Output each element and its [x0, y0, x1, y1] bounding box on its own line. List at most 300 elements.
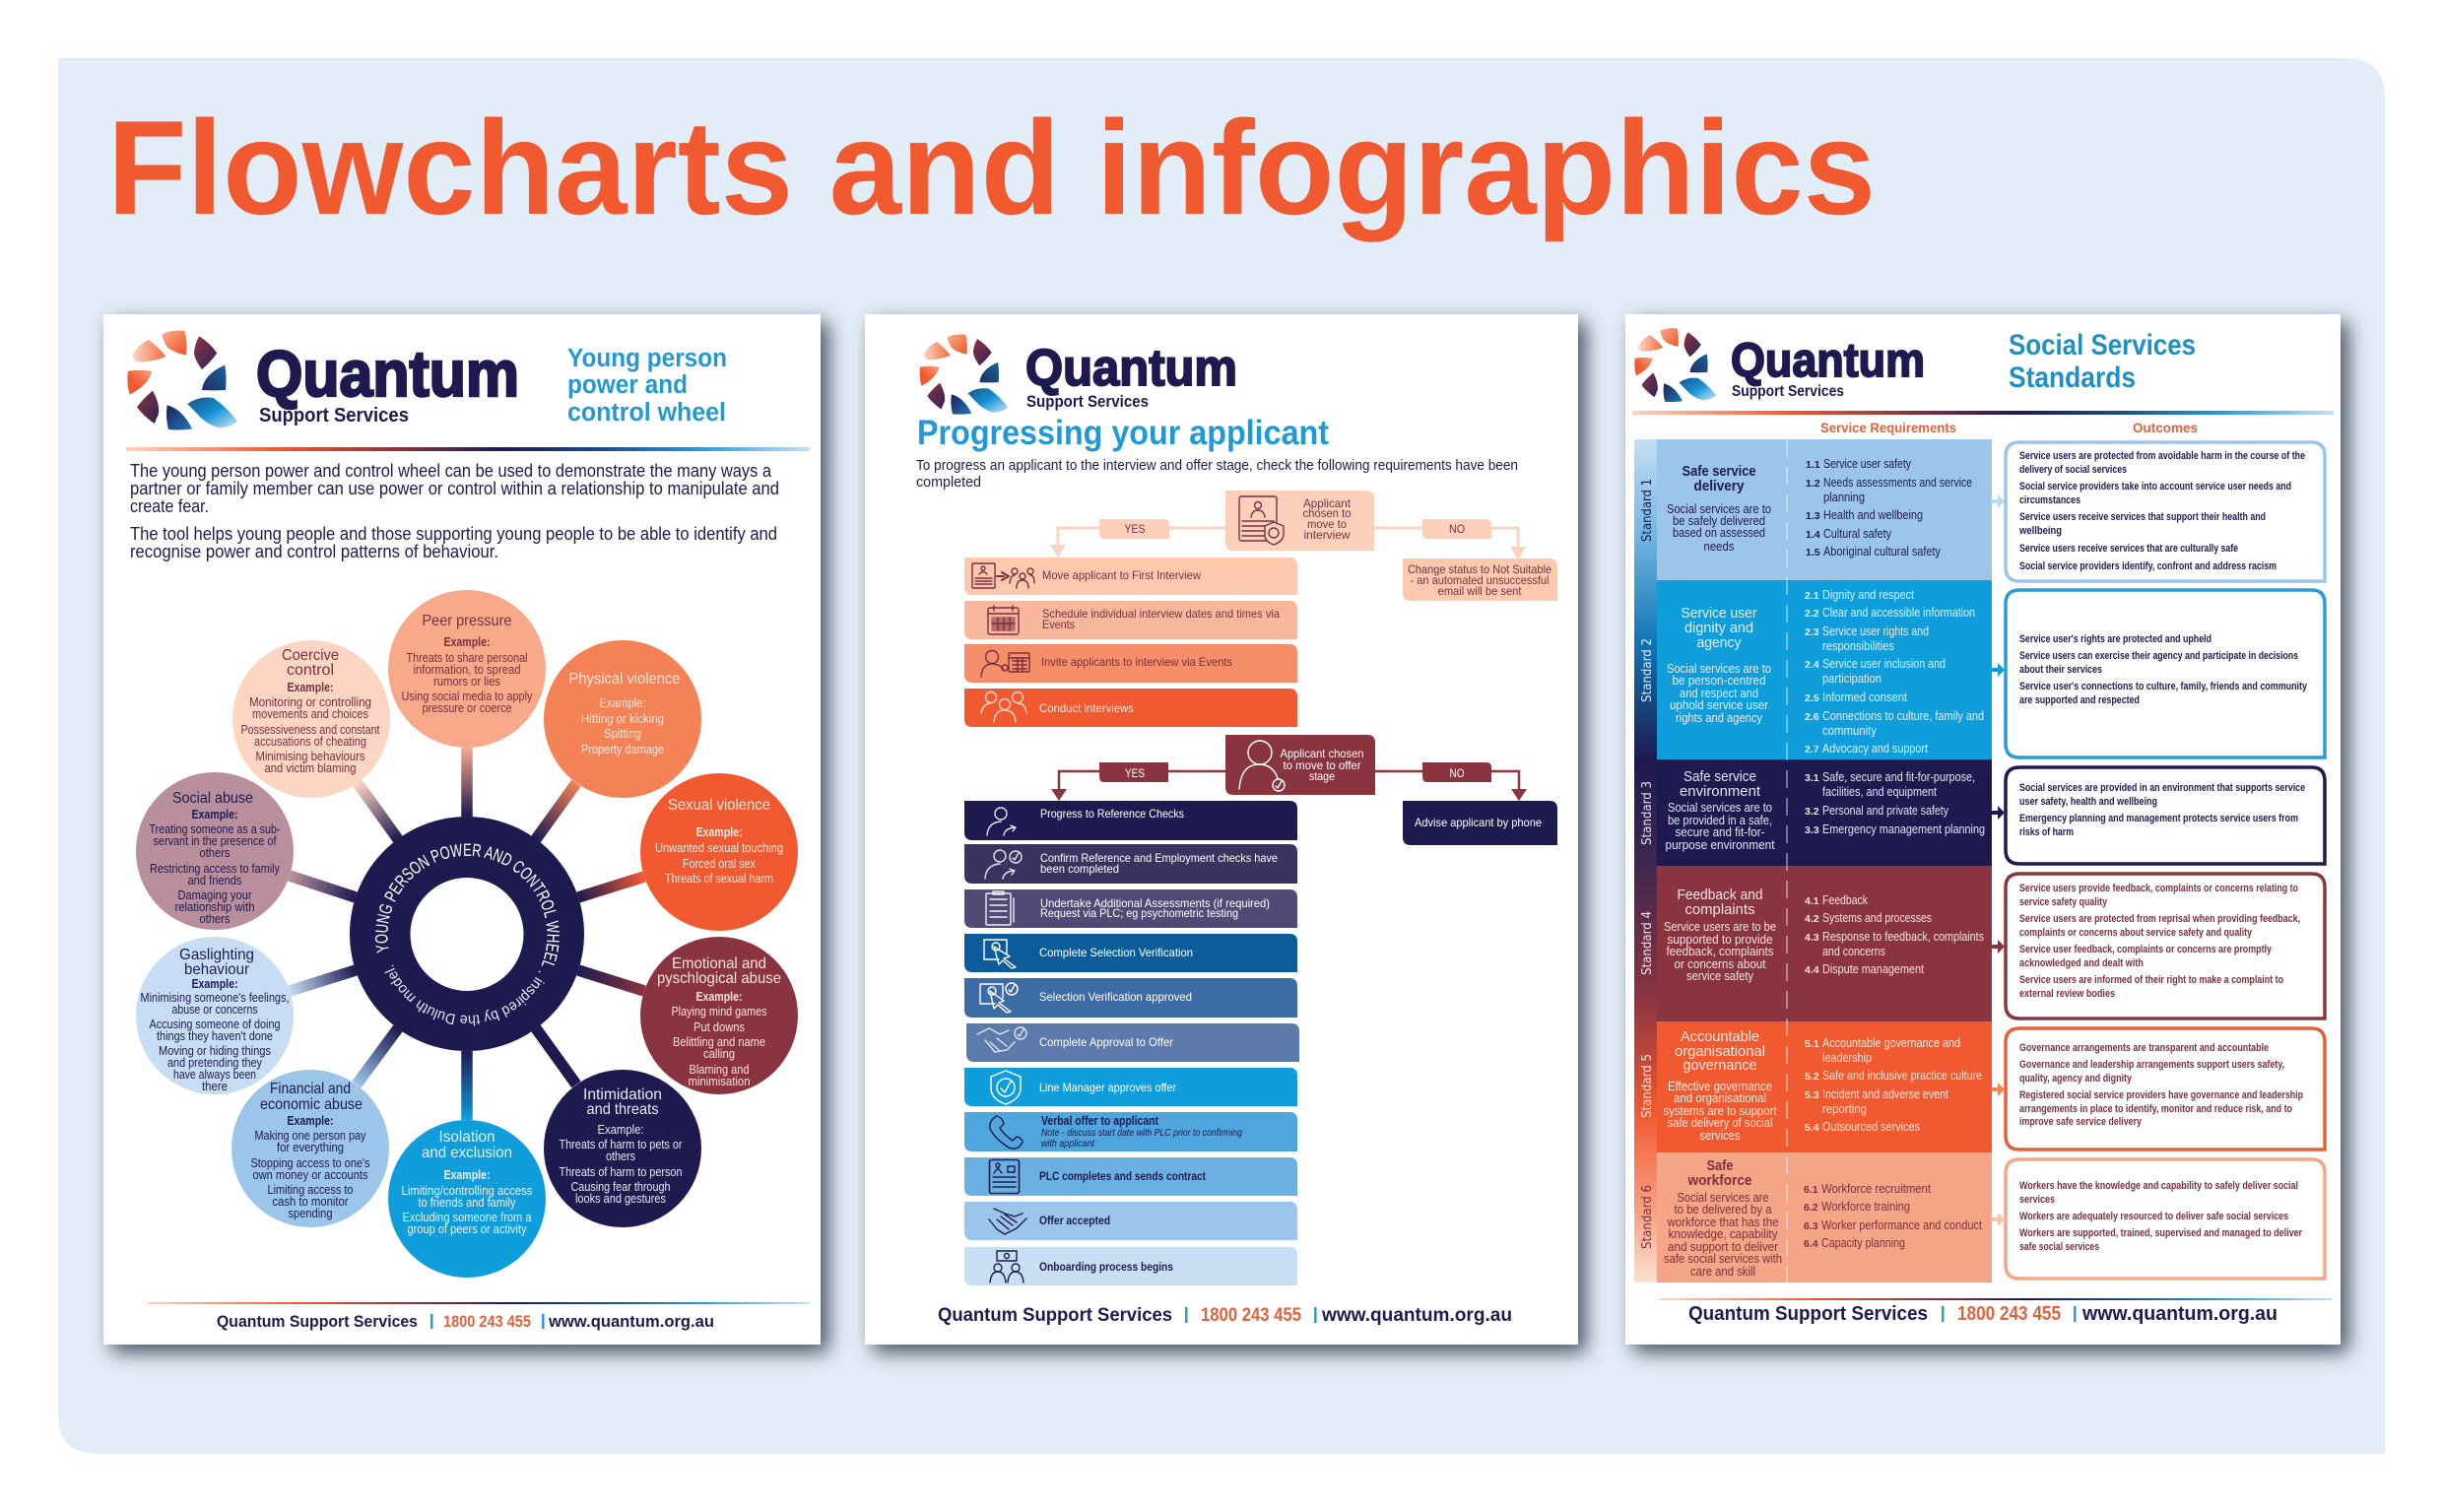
standard 4 row [1657, 866, 1992, 1021]
standard 6 row: Workforce recruitment [1821, 1181, 1931, 1196]
step: complete selection verification: Complete Selection Verification [1039, 946, 1193, 959]
circle: intimidation and threats: others [606, 1150, 635, 1163]
outcomes: standard 5: quality, agency and dignity [2019, 1073, 2133, 1085]
footer: contact details: www.quantum.org.au [548, 1312, 714, 1331]
step: verbal offer to applicant [964, 1112, 1297, 1151]
outcomes: standard 2: about their services [2019, 664, 2102, 676]
decision: applicant chosen to move to interview: interview [1304, 528, 1351, 542]
standard 1 row: Service user safety [1823, 456, 1911, 471]
panel heading: Progressing your applicant [917, 414, 1329, 452]
standard 5 row: Safe and inclusive practice culture [1822, 1068, 1982, 1083]
standard 6 row: 6.3 [1804, 1220, 1818, 1232]
icon: clipboard [986, 891, 1014, 925]
footer: contact details [938, 1304, 1512, 1326]
step: selection verification approved: Selection Verification approved [1039, 990, 1192, 1004]
outcomes: standard 2 [2006, 590, 2325, 757]
decision: applicant chosen to move to interview: Applicant [1303, 496, 1352, 510]
standard 2 row: and respect and [1680, 686, 1758, 700]
wheel hub: . inspired by the Duluth model. [384, 965, 545, 1026]
standard 3 row: environment [1680, 783, 1761, 800]
circle: emotional and psychological abuse: Example: [695, 990, 743, 1004]
intro text: The young person power and control wheel can be used to demonstrate the many ways a [130, 461, 772, 481]
circle: emotional and psychological abuse: Emotional and [672, 955, 766, 972]
circle: intimidation and threats: Threats of harm to person [560, 1165, 683, 1179]
standard 2 row: 2.7 [1805, 744, 1819, 756]
standard labels [1640, 479, 1655, 1249]
standard 2 row: 2.2 [1805, 608, 1819, 620]
standard 2 row: Advocacy and support [1822, 741, 1928, 756]
panel heading: Standards [2009, 362, 2136, 394]
intro text [916, 458, 1518, 491]
standard labels: Standard 1 [1640, 479, 1655, 542]
outcomes: standard 3: Emergency planning and management protects service users from [2019, 813, 2298, 824]
standard 2 row: 2.3 [1805, 626, 1819, 638]
circle: gaslighting behaviour: Gaslighting [179, 947, 254, 963]
standard 1 row: be safely delivered [1673, 513, 1765, 528]
circle: financial and economic abuse: cash to monitor [272, 1195, 349, 1209]
circle: intimidation and threats: Example: [597, 1123, 644, 1137]
standard labels: Standard 3 [1640, 781, 1655, 845]
panel heading [2009, 329, 2196, 394]
step: plc completes and sends contract [964, 1157, 1297, 1196]
standard 5 row: systems are to support [1663, 1103, 1777, 1118]
standard 2 row: 2.5 [1805, 692, 1819, 704]
circle: sexual violence: Sexual violence [668, 797, 770, 814]
standard 3 row: 3.2 [1805, 806, 1819, 818]
standard 1 row [1657, 439, 1992, 580]
standard 1 row: Health and wellbeing [1823, 507, 1923, 522]
circle: social abuse: Example: [191, 808, 238, 822]
footer: contact details: Quantum Support Services [1688, 1303, 1928, 1325]
standard 6 row: Worker performance and conduct [1821, 1217, 1982, 1232]
standard 1 row: Safe service [1683, 463, 1755, 480]
standard 6 row: Safe [1706, 1157, 1734, 1174]
standard 3 row: purpose environment [1665, 837, 1775, 852]
wheel spokes [290, 748, 644, 1120]
standard 3 row: secure and fit-for- [1675, 824, 1765, 839]
step: onboarding process begins [964, 1247, 1297, 1285]
outcomes: standard 5: arrangements in place to identify, monitor and reduce risk, and to [2019, 1103, 2292, 1115]
circle: sexual violence [640, 773, 798, 931]
circle: peer pressure: Example: [443, 635, 491, 649]
intro text: partner or family member can use power or control within a relationship to manipulate and [130, 479, 779, 498]
standard 6 row: 6.4 [1804, 1238, 1818, 1250]
standard 4 row: or concerns about [1675, 956, 1766, 971]
standard 4 row: Response to feedback, complaints [1822, 929, 1984, 944]
standard 4 row: and concerns [1822, 944, 1885, 958]
circle: financial and economic abuse: economic abuse [260, 1096, 363, 1113]
circle: coercive control: movements and choices [252, 707, 368, 721]
standard 6 row: Social services are [1677, 1190, 1769, 1205]
standard 5 row: Accountable governance and [1822, 1035, 1960, 1050]
standard 5 row: 5.3 [1805, 1089, 1819, 1101]
circle: financial and economic abuse: Making one person pay [254, 1129, 366, 1143]
step: line manager approves offer: Line Manager approves offer [1039, 1081, 1176, 1094]
outcomes: standard 5: Governance arrangements are transparent and accountable [2019, 1042, 2269, 1054]
circle: peer pressure: Peer pressure [422, 613, 512, 629]
standard 3 row: 3.1 [1805, 772, 1819, 784]
standard 2 row: Connections to culture, family and [1822, 708, 1984, 723]
standard 3 row: Safe service [1684, 768, 1756, 785]
logo: Support Services [259, 405, 409, 427]
circle: financial and economic abuse [231, 1070, 389, 1227]
label: no [1422, 519, 1491, 539]
standard 1 row: Aboriginal cultural safety [1823, 544, 1941, 559]
circle: social abuse: Damaging your [177, 888, 252, 902]
column headings: Service Requirements [1820, 420, 1956, 435]
icon: person with tick [1239, 741, 1285, 791]
standard 6 row: to be delivered by a [1675, 1202, 1772, 1216]
step: complete approval to offer: Complete Approval to Offer [1039, 1035, 1173, 1049]
circle: physical violence: Example: [599, 696, 646, 710]
circle: financial and economic abuse: Limiting access to [268, 1183, 354, 1197]
standard 4 row: 4.1 [1805, 895, 1819, 907]
step: conduct interviews: Conduct interviews [1039, 701, 1134, 715]
circle: intimidation and threats: looks and gestures [575, 1192, 666, 1206]
standard 4 row: 4.4 [1805, 964, 1819, 976]
circle: sexual violence: Unwanted sexual touching [655, 841, 783, 855]
circle: financial and economic abuse: Financial and [270, 1081, 351, 1097]
label: no: NO [1450, 766, 1464, 780]
standard labels: Standard 5 [1640, 1054, 1655, 1118]
circle: sexual violence: Threats of sexual harm [665, 872, 773, 886]
standard labels: Standard 2 [1640, 638, 1655, 702]
outcome: change status to not suitable: email will be sent [1438, 584, 1522, 598]
circle: emotional and psychological abuse: calling [703, 1047, 735, 1061]
step: conduct interviews [964, 689, 1297, 727]
standard 2 row: agency [1696, 634, 1742, 651]
step: confirm reference and employment checks [964, 844, 1297, 884]
step: move applicant to first interview: Move applicant to First Interview [1042, 568, 1201, 582]
panel: young person power and control wheel [97, 307, 843, 1367]
circle: intimidation and threats [544, 1070, 701, 1227]
step: offer accepted: Offer accepted [1039, 1214, 1110, 1227]
standard 4 row: 4.3 [1805, 932, 1819, 944]
standard 6 row: 6.2 [1804, 1202, 1818, 1214]
circle: social abuse: and friends [187, 874, 242, 887]
standard 4 row: feedback, complaints [1667, 944, 1774, 958]
outcomes: standard 1: circumstances [2019, 494, 2080, 506]
standard 5 row: safe delivery of social [1667, 1115, 1773, 1130]
logo [127, 330, 519, 430]
outcomes: standard 3: user safety, health and wellbeing [2019, 796, 2157, 808]
decision: applicant chosen to move to interview: chosen to [1302, 506, 1352, 520]
title: Flowcharts and infographics [107, 93, 1876, 242]
standard 5 row: organisational [1675, 1043, 1765, 1060]
standard 5 row: governance [1683, 1057, 1757, 1074]
logo: Quantum [1025, 340, 1237, 397]
step: progress to reference checks: Progress to Reference Checks [1040, 807, 1184, 821]
circle: sexual violence: Forced oral sex [683, 857, 757, 871]
outcomes: standard 1: Service users are protected from avoidable harm in the course of the [2019, 450, 2305, 462]
outcomes: standard 2: Service user's connections to culture, family, friends and community [2019, 681, 2308, 692]
circle: physical violence: Hitting or kicking [581, 712, 664, 726]
standard 2 row: Dignity and respect [1822, 587, 1914, 602]
arrows: requirements to outcomes [1991, 494, 2005, 1226]
standard 5 row: Accountable [1681, 1028, 1759, 1045]
standard 5 row: 5.4 [1805, 1122, 1819, 1134]
circle: emotional and psychological abuse [640, 937, 798, 1094]
circle: intimidation and threats: Causing fear through [571, 1180, 671, 1194]
circle: social abuse: Treating someone as a sub- [150, 822, 280, 836]
standard 5 row: leadership [1822, 1050, 1872, 1065]
standard 5 row: Incident and adverse event [1822, 1086, 1948, 1101]
standard 4 row: 4.2 [1805, 913, 1819, 925]
footer: contact details: 1800 243 455 [1957, 1303, 2061, 1325]
circle: gaslighting behaviour: Example: [191, 977, 238, 991]
standard 2 row: Social services are to [1667, 661, 1771, 676]
intro text: The tool helps young people and those supporting young people to be able to identify and [130, 524, 777, 544]
standard labels: Standard 4 [1640, 911, 1655, 975]
footer: contact details: 1800 243 455 [443, 1312, 531, 1331]
standard 3 row: Emergency management planning [1822, 822, 1985, 836]
circle: social abuse: Social abuse [172, 790, 253, 807]
circle: emotional and psychological abuse: Blaming and [690, 1063, 750, 1077]
circle: coercive control: Example: [288, 681, 333, 694]
outcomes: standard 5: Governance and leadership arrangements support users safety, [2019, 1059, 2284, 1071]
standard 6 row: and support to deliver [1668, 1239, 1779, 1254]
circle: gaslighting behaviour: Moving or hiding things [159, 1044, 271, 1058]
standard 4 row: Feedback and [1677, 887, 1763, 903]
circle: sexual violence: Example: [695, 825, 743, 839]
outcomes: standard 5: improve safe service delivery [2019, 1116, 2143, 1128]
circle: isolation and exclusion: Example: [443, 1168, 491, 1182]
outcomes: standard 6: services [2019, 1194, 2055, 1206]
standard 2 row: 2.6 [1805, 711, 1819, 723]
icon: telephone [990, 1116, 1023, 1149]
outcomes: standard 4: Service user feedback, complaints or concerns are promptly [2019, 944, 2273, 955]
decision: applicant chosen to move to offer stage: stage [1309, 769, 1335, 783]
circle: intimidation and threats: Threats of harm to pets or [560, 1138, 682, 1151]
circle: peer pressure: Threats to share personal [406, 651, 528, 665]
step: complete selection verification [964, 934, 1297, 972]
wheel hub [350, 817, 584, 1051]
standard 6 row: workforce that has the [1667, 1215, 1779, 1229]
outcomes: standard 6: Workers have the knowledge and capability to safely deliver social [2019, 1180, 2298, 1192]
label: yes: YES [1125, 766, 1145, 780]
step: schedule interview dates: Events [1042, 618, 1075, 631]
outcome: advise applicant by phone [1403, 801, 1557, 845]
outcome: advise applicant by phone: Advise applicant by phone [1415, 816, 1542, 829]
step: plc completes and sends contract: PLC completes and sends contract [1039, 1169, 1206, 1183]
standard 3 row: Personal and private safety [1822, 803, 1948, 818]
decision: applicant chosen to move to interview: move to [1307, 517, 1347, 531]
panel heading: control wheel [567, 399, 726, 427]
step: invite applicants: Invite applicants to interview via Events [1041, 655, 1232, 669]
outcomes: standard 4: acknowledged and dealt with [2019, 957, 2144, 969]
standard 6 row: Capacity planning [1821, 1235, 1905, 1250]
circle: peer pressure: pressure or coerce [422, 701, 512, 715]
logo: Quantum [256, 337, 519, 410]
icon: two people with screen [990, 1251, 1023, 1282]
standard 2 row: rights and agency [1676, 710, 1762, 725]
circle: gaslighting behaviour: things they haven't done [157, 1029, 273, 1043]
logo [920, 334, 1237, 415]
standard 4 row: Dispute management [1822, 961, 1924, 976]
step: undertake additional assessments: Request via PLC; eg psychometric testing [1040, 906, 1238, 920]
panel: social services standards [1625, 314, 2341, 1345]
footer: contact details [217, 1312, 714, 1331]
standard 6 row: Workforce training [1821, 1199, 1910, 1214]
icon: handshake with tick [977, 1027, 1026, 1052]
outcomes: standard 1 [2006, 442, 2325, 581]
standard 6 row: 6.1 [1804, 1184, 1818, 1196]
icon: three people [981, 691, 1026, 722]
icon: contract [989, 1160, 1019, 1194]
circle: emotional and psychological abuse: pyschlogical abuse [657, 970, 781, 987]
wheel hub: YOUNG PERSON POWER AND CONTROL WHEEL [374, 843, 560, 966]
circle: isolation and exclusion: Excluding someone from a [402, 1211, 532, 1224]
circle: gaslighting behaviour: abuse or concerns [171, 1003, 258, 1017]
circle: coercive control: Monitoring or controlling [249, 695, 371, 709]
standard 5 row [1657, 1021, 1992, 1152]
offer decision connectors [1051, 771, 1527, 801]
icon: handshake [989, 1209, 1026, 1234]
outcomes: standard 3: Social services are provided in an environment that supports service [2019, 782, 2305, 794]
circle: coercive control: and victim blaming [264, 761, 357, 775]
icon: person with calendar [981, 650, 1029, 677]
step: offer accepted [964, 1202, 1297, 1240]
interview decision connectors [1050, 528, 1526, 559]
step: complete approval to offer [966, 1023, 1299, 1062]
standard 4 row: Service users are to be [1664, 919, 1776, 934]
standard 2 row: Informed consent [1822, 690, 1907, 704]
outcomes: standard 4: complaints or concerns about service safety and quality [2019, 927, 2253, 939]
decision: applicant chosen to move to offer stage [1225, 735, 1375, 795]
label: no [1422, 762, 1491, 782]
standard 5 row: 5.1 [1805, 1038, 1819, 1050]
standard 1 row: 1.2 [1806, 478, 1820, 490]
standard 1 row: based on assessed [1673, 525, 1765, 540]
circle: physical violence: Property damage [581, 743, 664, 756]
logo: Support Services [1732, 383, 1844, 400]
icon: applicant moved to interview [972, 563, 1034, 588]
label: no: NO [1449, 522, 1465, 536]
step: schedule interview dates: Schedule individual interview dates and times via [1042, 607, 1280, 621]
circle: gaslighting behaviour: Accusing someone of doing [150, 1018, 281, 1031]
logo [1634, 328, 1925, 402]
standard 2 row: participation [1822, 671, 1882, 686]
standard 4 row: Systems and processes [1822, 910, 1932, 925]
standard 2 row: Clear and accessible information [1822, 605, 1975, 620]
circle: financial and economic abuse: spending [288, 1207, 333, 1220]
label: yes [1099, 762, 1168, 782]
standard 4 row: complaints [1684, 901, 1755, 918]
standard 2 row: dignity and [1684, 620, 1753, 636]
standard 2 row: Service user [1681, 605, 1757, 622]
standard 6 row [1657, 1152, 1992, 1282]
circle: social abuse: relationship with [175, 900, 255, 914]
outcomes: standard 4: external review bodies [2019, 988, 2115, 1000]
outcomes: standard 4: Service users provide feedback, complaints or concerns relating to [2019, 883, 2298, 894]
circle: coercive control [232, 640, 390, 798]
column headings [1820, 420, 2198, 435]
standard 1 row: 1.5 [1806, 547, 1820, 559]
circle: gaslighting behaviour: Minimising someone's feelings, [140, 991, 290, 1005]
circle: emotional and psychological abuse: Playing mind games [672, 1005, 766, 1019]
circle: financial and economic abuse: Stopping access to one's [250, 1156, 370, 1170]
decision: applicant chosen to move to offer stage: Applicant chosen [1281, 747, 1363, 760]
circle: gaslighting behaviour: there [202, 1080, 228, 1093]
circle: coercive control: Possessiveness and constant [240, 723, 380, 737]
standard 2 row: community [1822, 723, 1877, 738]
outcome: change status to not suitable: Change status to Not Suitable [1408, 562, 1552, 576]
circle: financial and economic abuse: own money or accounts [252, 1168, 368, 1182]
step: selection verification approved [964, 978, 1297, 1018]
standard 1 row: 1.1 [1806, 459, 1820, 471]
standard 2 row: be person-centred [1673, 673, 1765, 688]
standard 2 row: responsibilities [1822, 638, 1894, 653]
footer: contact details: 1800 243 455 [1201, 1304, 1301, 1326]
circle: gaslighting behaviour: have always been [173, 1068, 256, 1082]
standard 6 row: knowledge, capability [1669, 1226, 1778, 1241]
column headings: Outcomes [2133, 420, 2198, 435]
standard 1 row: Social services are to [1667, 501, 1771, 516]
circle: coercive control: Minimising behaviours [256, 750, 364, 763]
intro text: To progress an applicant to the interview and offer stage, check the following requirements have been [916, 458, 1518, 474]
circle: isolation and exclusion: Isolation [439, 1129, 495, 1146]
outcomes: standard 3 [2006, 767, 2325, 864]
circle: financial and economic abuse: Example: [288, 1114, 333, 1128]
step: schedule interview dates [964, 601, 1297, 639]
circle: isolation and exclusion: to friends and family [418, 1196, 516, 1210]
standard 6 row: safe social services with [1664, 1251, 1782, 1266]
step: undertake additional assessments [964, 889, 1297, 928]
standard 5 row: and organisational [1674, 1090, 1766, 1105]
footer: contact details: Quantum Support Services [938, 1304, 1172, 1326]
circle: gaslighting behaviour [136, 937, 294, 1094]
outcomes: standard 1: Service users receive services that are culturally safe [2019, 543, 2238, 555]
outcomes: standard 3: risks of harm [2019, 826, 2074, 838]
standard 4 row: Feedback [1822, 892, 1868, 907]
footer: contact details: www.quantum.org.au [2081, 1303, 2278, 1325]
circle: social abuse: others [199, 846, 231, 860]
panel heading: Young person [567, 345, 727, 372]
standard 1 row: 1.3 [1806, 510, 1820, 522]
panel heading [567, 345, 727, 427]
circle: coercive control: control [287, 662, 334, 679]
decision: applicant chosen to move to offer stage: to move to offer [1283, 758, 1361, 772]
standard 2 row: 2.4 [1805, 659, 1819, 671]
step: line manager approves offer [964, 1068, 1297, 1106]
step: verbal offer to applicant: with applicant [1041, 1138, 1095, 1150]
label: yes [1099, 519, 1169, 539]
standard 4 row: service safety [1686, 968, 1753, 983]
panel heading: power and [567, 371, 688, 399]
outcomes: standard 1: Service users receive services that support their health and [2019, 511, 2266, 523]
step: onboarding process begins: Onboarding process begins [1039, 1260, 1173, 1274]
logo: Quantum [1731, 335, 1925, 387]
circle: peer pressure: Using social media to apply [402, 690, 533, 703]
outcomes: standard 1: Social service providers take into account service user needs and [2019, 481, 2291, 493]
icon: cursor with tick [980, 983, 1018, 1013]
footer: contact details: Quantum Support Services [217, 1312, 418, 1331]
standard 3 row: Safe, secure and fit-for-purpose, [1822, 769, 1975, 784]
intro text [130, 461, 779, 561]
circle: peer pressure: rumors or lies [433, 675, 500, 689]
circle: social abuse: Restricting access to family [150, 862, 281, 876]
step: undertake additional assessments: Undertake Additional Assessments (if required) [1040, 896, 1270, 910]
circle: isolation and exclusion [388, 1120, 546, 1278]
standard 2 row: Service user inclusion and [1822, 656, 1946, 671]
icon: shield with tick [991, 1071, 1021, 1104]
outcomes: standard 5: Registered social service providers have governance and leadership [2019, 1089, 2303, 1101]
standard 5 row: Effective governance [1668, 1079, 1772, 1093]
circle: intimidation and threats: Intimidation [583, 1086, 662, 1103]
step: verbal offer to applicant: Verbal offer to applicant [1041, 1114, 1159, 1128]
standard labels: Standard 6 [1640, 1185, 1655, 1249]
circle: isolation and exclusion: group of peers or activity [408, 1222, 527, 1236]
